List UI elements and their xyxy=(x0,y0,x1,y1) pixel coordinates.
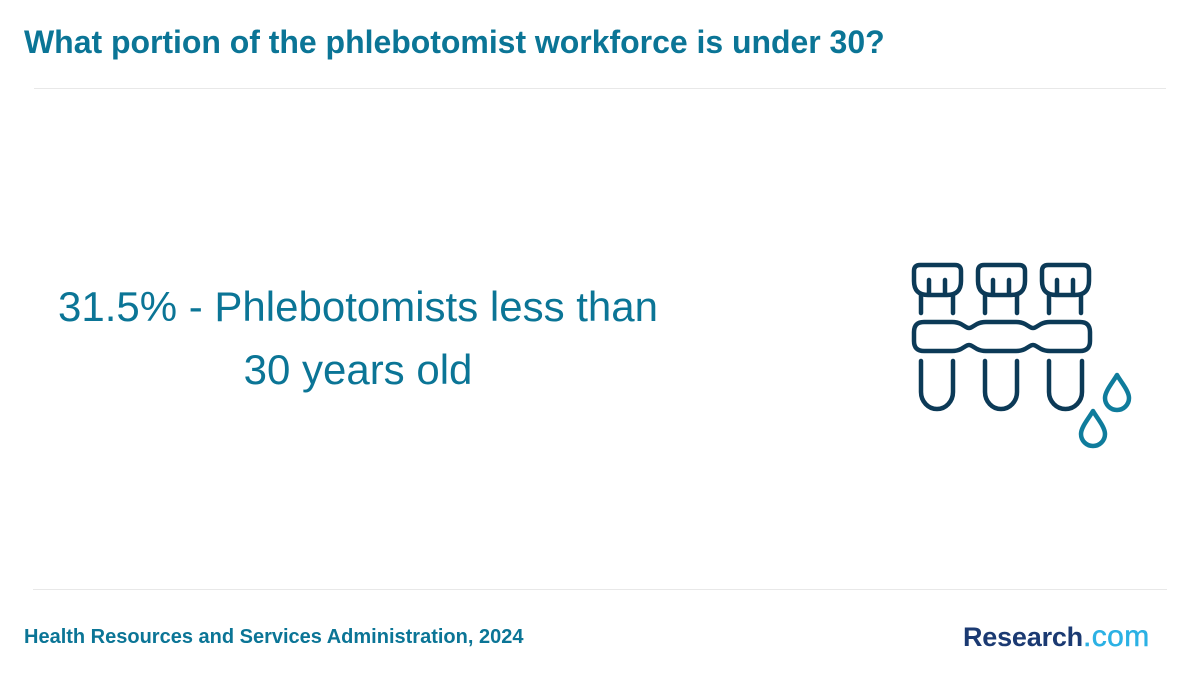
drop lower xyxy=(1081,411,1105,446)
rack xyxy=(914,322,1090,351)
drop upper xyxy=(1105,375,1129,410)
source note: Health Resources and Services Administration, 2024 xyxy=(24,626,523,648)
main statistic text: 30 years old xyxy=(244,346,472,393)
tube 3 xyxy=(1049,361,1082,409)
logo: Research.com: Research.com xyxy=(963,620,1150,653)
tube 1 xyxy=(921,361,953,409)
title: What portion of the phlebotomist workforce is under 30? xyxy=(24,24,885,60)
icon: test tubes with drops xyxy=(912,262,1132,448)
cap 2 xyxy=(978,265,1025,313)
main statistic text: 31.5% - Phlebotomists less than xyxy=(58,283,658,330)
tube 2 xyxy=(985,361,1017,409)
main statistic text xyxy=(58,283,658,393)
cap 1 xyxy=(914,265,961,313)
cap 3 xyxy=(1042,265,1089,313)
